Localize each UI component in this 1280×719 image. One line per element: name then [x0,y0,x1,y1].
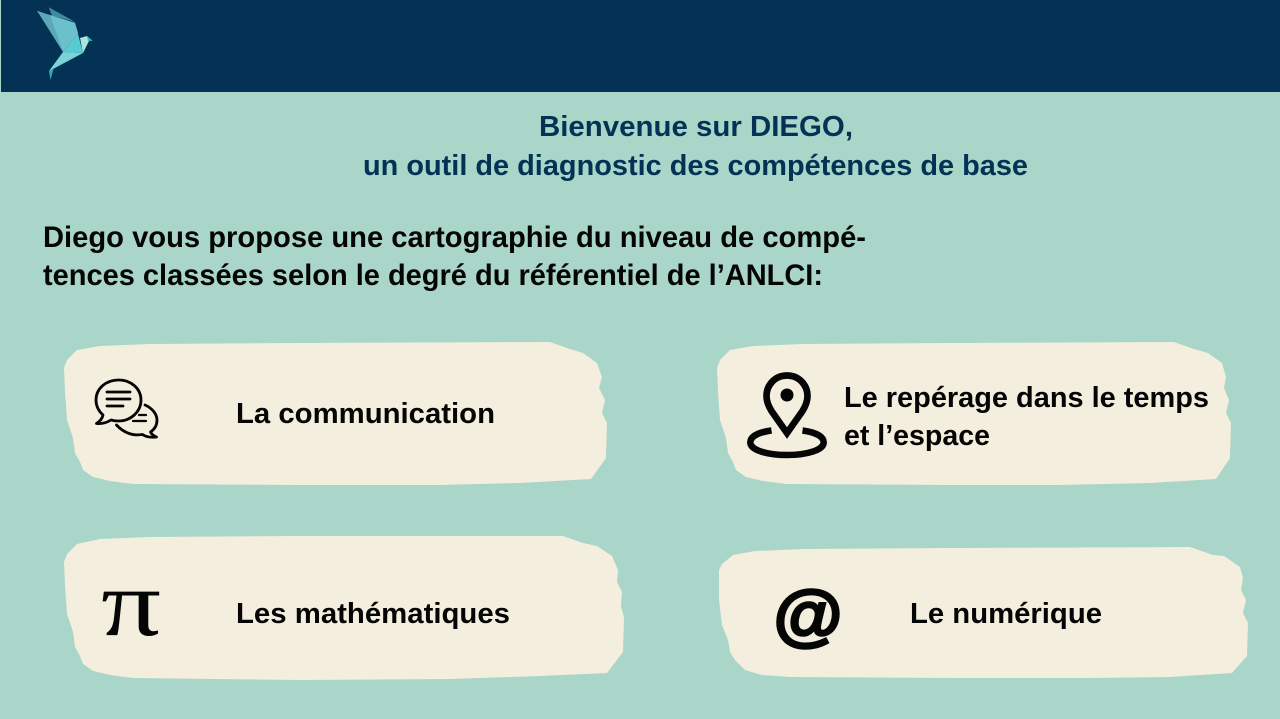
title [363,111,1028,182]
label: Le repérage dans le temps [844,382,1209,414]
panel: repérage: et l’espace [844,420,990,452]
panel: mathématiques [64,536,624,680]
label: Les mathématiques [236,598,510,630]
title: Bienvenue sur DIEGO, [539,111,853,143]
subtitle text block: tences classées selon le degré du référentiel de l’ANLCI: [43,259,823,292]
icon: pi: π [101,552,161,656]
label: Le numérique [910,598,1102,630]
label: La communication [236,398,495,430]
subtitle text block: Diego vous propose une cartographie du niveau de compé- [43,221,866,254]
header band [1,0,1280,92]
panel: numérique [719,547,1248,678]
title: un outil de diagnostic des compétences de base [363,150,1028,182]
subtitle text block [43,221,866,292]
icon: at sign: @ [774,577,842,653]
panel: repérage [717,342,1231,485]
icon: location pin [750,376,824,455]
icon: speech bubbles [96,380,157,437]
panel: la communication [64,342,607,485]
logo: origami bird [37,7,93,80]
